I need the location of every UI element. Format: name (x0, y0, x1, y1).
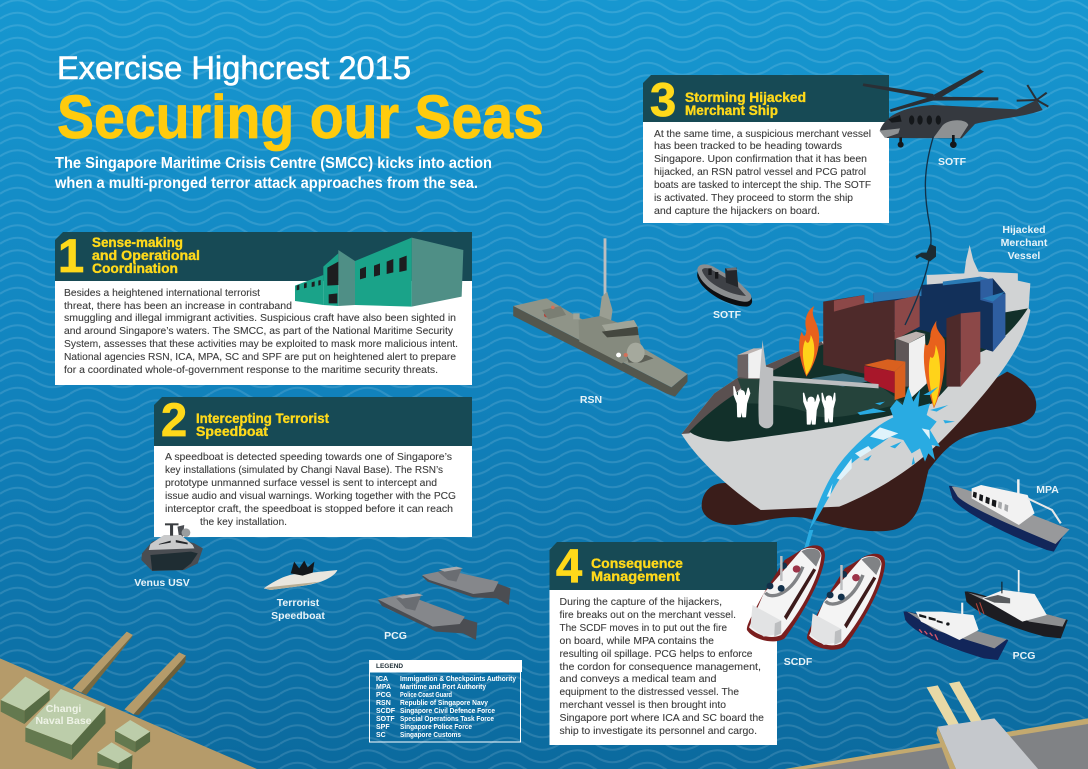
bow cabin (737, 353, 748, 378)
subtitle (54, 155, 492, 192)
legend: LEGEND (376, 663, 403, 670)
panel 4 heading (591, 556, 684, 584)
panel 2 body text: key installations (simulated by Changi Naval Base). The RSN’s (165, 465, 443, 476)
icon: SMCC building (295, 238, 463, 307)
panel 3 body text: has been tracked to be heading towards (654, 141, 842, 152)
panel 2 body text: prototype unmanned surface vessel is sent to intercept and (165, 478, 437, 489)
panel 2 heading (196, 411, 329, 439)
legend rows: Police Coast Guard (400, 692, 452, 699)
splash body (809, 387, 940, 530)
PCG boat: rear (422, 567, 510, 605)
hijacked merchant vessel (681, 245, 1030, 510)
title (54, 50, 544, 192)
label: Hijacked Merchant Vessel (1001, 224, 1048, 262)
buildings (1, 677, 150, 769)
panel 3 header (643, 75, 889, 122)
droplets (857, 387, 955, 465)
label: Terrorist Speedboat (271, 597, 325, 622)
jet to SCDF boat (799, 530, 813, 567)
panel 4 body text: During the capture of the hijackers, (560, 597, 722, 608)
label: RSN: RSN (580, 394, 602, 406)
panel 4: consequence management (550, 539, 777, 745)
panel 3 body text (654, 129, 871, 217)
legend rows: Singapore Civil Defence Force (400, 708, 495, 715)
panel 1 heading (92, 235, 200, 276)
panel 2: intercepting terrorist speedboat (154, 393, 472, 537)
panel 2 number: 2 (161, 393, 187, 446)
panel 4 body text: fire breaks out on the merchant vessel. (560, 610, 736, 621)
deck rail (771, 376, 879, 388)
PCG patrol boat: navy (904, 603, 1008, 660)
panel 2 body text: the key installation. (200, 517, 287, 528)
orange container (895, 362, 905, 400)
panel 3: storming hijacked merchant ship (643, 73, 889, 223)
PCG patrol boats (904, 570, 1068, 660)
panel 3 heading (685, 90, 806, 118)
label: SCDF: SCDF (784, 656, 813, 668)
land: port at bottom right (785, 681, 1088, 769)
panel 2 body text: issue audio and visual warnings. Working together with the PCG (165, 491, 456, 502)
panel 3 body text: At the same time, a suspicious merchant vessel (654, 129, 871, 140)
fire: left (799, 306, 819, 377)
label: SOTF helicopter: SOTF (938, 156, 967, 168)
legend rows: Singapore Police Force (400, 724, 472, 731)
fuselage (880, 100, 1043, 138)
legend (369, 660, 522, 742)
legend rows: SPF (376, 724, 390, 731)
label: Changi Naval Base (35, 703, 92, 727)
label: Changi Naval Base: Naval Base (35, 715, 92, 727)
panel 4 heading: Consequence (591, 556, 684, 571)
terrorist speedboat (264, 561, 337, 590)
RSN patrol vessel (513, 238, 687, 397)
Venus USV (141, 523, 203, 571)
label: Terrorist Speedboat: Speedboat (271, 610, 325, 622)
rope (905, 137, 933, 325)
panel 1 body text: for a coordinated whole-of-government response to the maritime security threats. (64, 365, 438, 376)
legend rows: SOTF (376, 716, 395, 723)
SCDF boat 1 (747, 545, 825, 641)
water jet and splash (799, 387, 955, 567)
label: Terrorist Speedboat: Terrorist (277, 597, 320, 609)
panel 3 body text: and capture the hijackers on board. (654, 206, 820, 217)
subtitle: The Singapore Maritime Crisis Centre (SMCC) kicks into action (55, 155, 492, 172)
label: MPA: MPA (1036, 484, 1059, 496)
panel 4 body text: merchant vessel is then brought into (560, 700, 726, 711)
panel 4 body text: Singapore port where ICA and SC board the (560, 713, 764, 724)
panel 1 body text: threat, there has been an increase in contraband (64, 301, 292, 312)
legend rows (376, 676, 516, 739)
panel 4 number: 4 (556, 539, 582, 592)
legend rows: Singapore Customs (400, 732, 461, 739)
brown containers (823, 295, 895, 380)
legend rows: SCDF (376, 708, 396, 715)
SCDF boat 2 (807, 554, 885, 650)
panel 1 heading: Sense-making (92, 235, 183, 250)
panel 3 body text: Singapore. Upon confirmation that it has been (654, 154, 867, 165)
rappelling soldier (915, 244, 936, 261)
tail rotor (1017, 85, 1048, 107)
panel 2 body text (165, 452, 456, 528)
panel 1 header (55, 232, 472, 281)
superstructure (927, 245, 1030, 330)
land: Changi Naval Base (0, 632, 257, 769)
panel 3 body text: is activated. They proceed to storm the ship (654, 193, 853, 204)
panel 3 heading: Storming Hijacked (685, 90, 806, 105)
panel 4 body text: The SCDF moves in to put out the fire (560, 623, 727, 634)
label: PCG patrol: PCG (1013, 650, 1035, 662)
legend rows: Immigration & Checkpoints Authority (400, 676, 516, 683)
panel 4 body text: equipment to the distressed vessel. The (560, 687, 739, 698)
panel 1 body text: National agencies RSN, ICA, MPA, SC and SPF are put on heightened alert to prepare (64, 352, 456, 363)
PCG patrol boat: black (965, 570, 1068, 638)
streaks (827, 427, 930, 497)
white container (896, 338, 909, 387)
panel 3 body text: hijacked, an RSN patrol vessel and PCG patrol (654, 167, 866, 178)
pier: left (73, 632, 133, 695)
label: SOTF boat: SOTF (713, 309, 742, 321)
PCG boat: front (378, 593, 477, 640)
oil spill (702, 372, 1036, 531)
hull (681, 308, 1030, 510)
panel 1 heading: and Operational (92, 248, 200, 263)
panel 2 body text: A speedboat is detected speeding towards one of Singapore’s (165, 452, 452, 463)
label: PCG: PCG (384, 630, 407, 642)
legend rows: Special Operations Task Force (400, 716, 494, 723)
legend rows: Republic of Singapore Navy (400, 700, 488, 707)
panel 3 number: 3 (650, 73, 676, 126)
label: Hijacked Merchant Vessel: Hijacked (1002, 224, 1046, 236)
panel 1: sense-making (55, 229, 472, 385)
panel 4 header (550, 542, 777, 590)
panel 3 heading: Merchant Ship (685, 103, 778, 118)
panel 1 body text: Besides a heightened international terrorist (64, 288, 260, 299)
blue containers (873, 290, 943, 330)
panel 2 body text: interceptor craft, the speedboat is stopped before it can reach (165, 504, 453, 515)
label: Hijacked Merchant Vessel: Vessel (1008, 250, 1040, 262)
label: Hijacked Merchant Vessel: Merchant (1001, 237, 1048, 249)
deck (689, 308, 1028, 442)
panel 1 heading: Coordination (92, 261, 178, 276)
main heading: Securing our Seas (57, 83, 544, 151)
subtitle: when a multi-pronged terror attack approaches from the sea. (54, 175, 478, 192)
panel 1 body text: and around Singapore’s waters. The SMCC, as part of the National Maritime Security (64, 326, 453, 337)
MPA vessel (949, 479, 1070, 552)
panel 1 body text: smuggling and illegal immigrant activities. Suspicious craft have also been sighted in (64, 313, 456, 324)
panel 3 body text: boats are tasked to intercept the ship. The SOTF (654, 180, 871, 191)
panel 4 body text: on board, while MPA contains the (560, 636, 714, 647)
legend rows: PCG (376, 692, 392, 699)
legend rows: SC (376, 732, 386, 739)
panel 2 heading: Intercepting Terrorist (196, 411, 329, 426)
SCDF fire boats (747, 545, 885, 650)
legend rows: Maritime and Port Authority (400, 684, 486, 691)
main rotor (863, 69, 998, 112)
panel 4 heading: Management (591, 569, 681, 584)
title: Exercise Highcrest 2015 (57, 50, 411, 86)
hatch cover (811, 373, 875, 387)
panel 4 body text: the cordon for consequence management, (560, 662, 761, 673)
bow mast (758, 340, 773, 428)
fire: right (924, 321, 945, 408)
panel 2 header (154, 397, 472, 446)
landing gear (898, 135, 957, 148)
panel 4 body text: and conveys a medical team and (560, 674, 716, 685)
panel 4 body text: ship to investigate its personnel and cargo. (560, 726, 757, 737)
hijackers with raised arms (734, 387, 835, 424)
small SOTF raft (697, 264, 752, 307)
label: Venus USV: Venus USV (134, 577, 190, 589)
legend rows: MPA (376, 684, 391, 691)
panel 1 body text: System, assesses that these activities may be exploited to mask more malicious intent. (64, 339, 458, 350)
panel 2 heading: Speedboat (196, 424, 269, 439)
label: Changi Naval Base: Changi (46, 703, 81, 715)
legend rows: RSN (376, 700, 391, 707)
helicopter (863, 69, 1048, 325)
panel 1 body text (64, 288, 458, 376)
panel 1 number: 1 (58, 229, 84, 282)
panel 4 body text (560, 597, 764, 737)
panel 4 body text: resulting oil spillage. PCG helps to enforce (560, 649, 753, 660)
pier: right (124, 652, 186, 715)
PCG interceptor boats (378, 567, 510, 640)
legend rows: ICA (376, 676, 388, 683)
